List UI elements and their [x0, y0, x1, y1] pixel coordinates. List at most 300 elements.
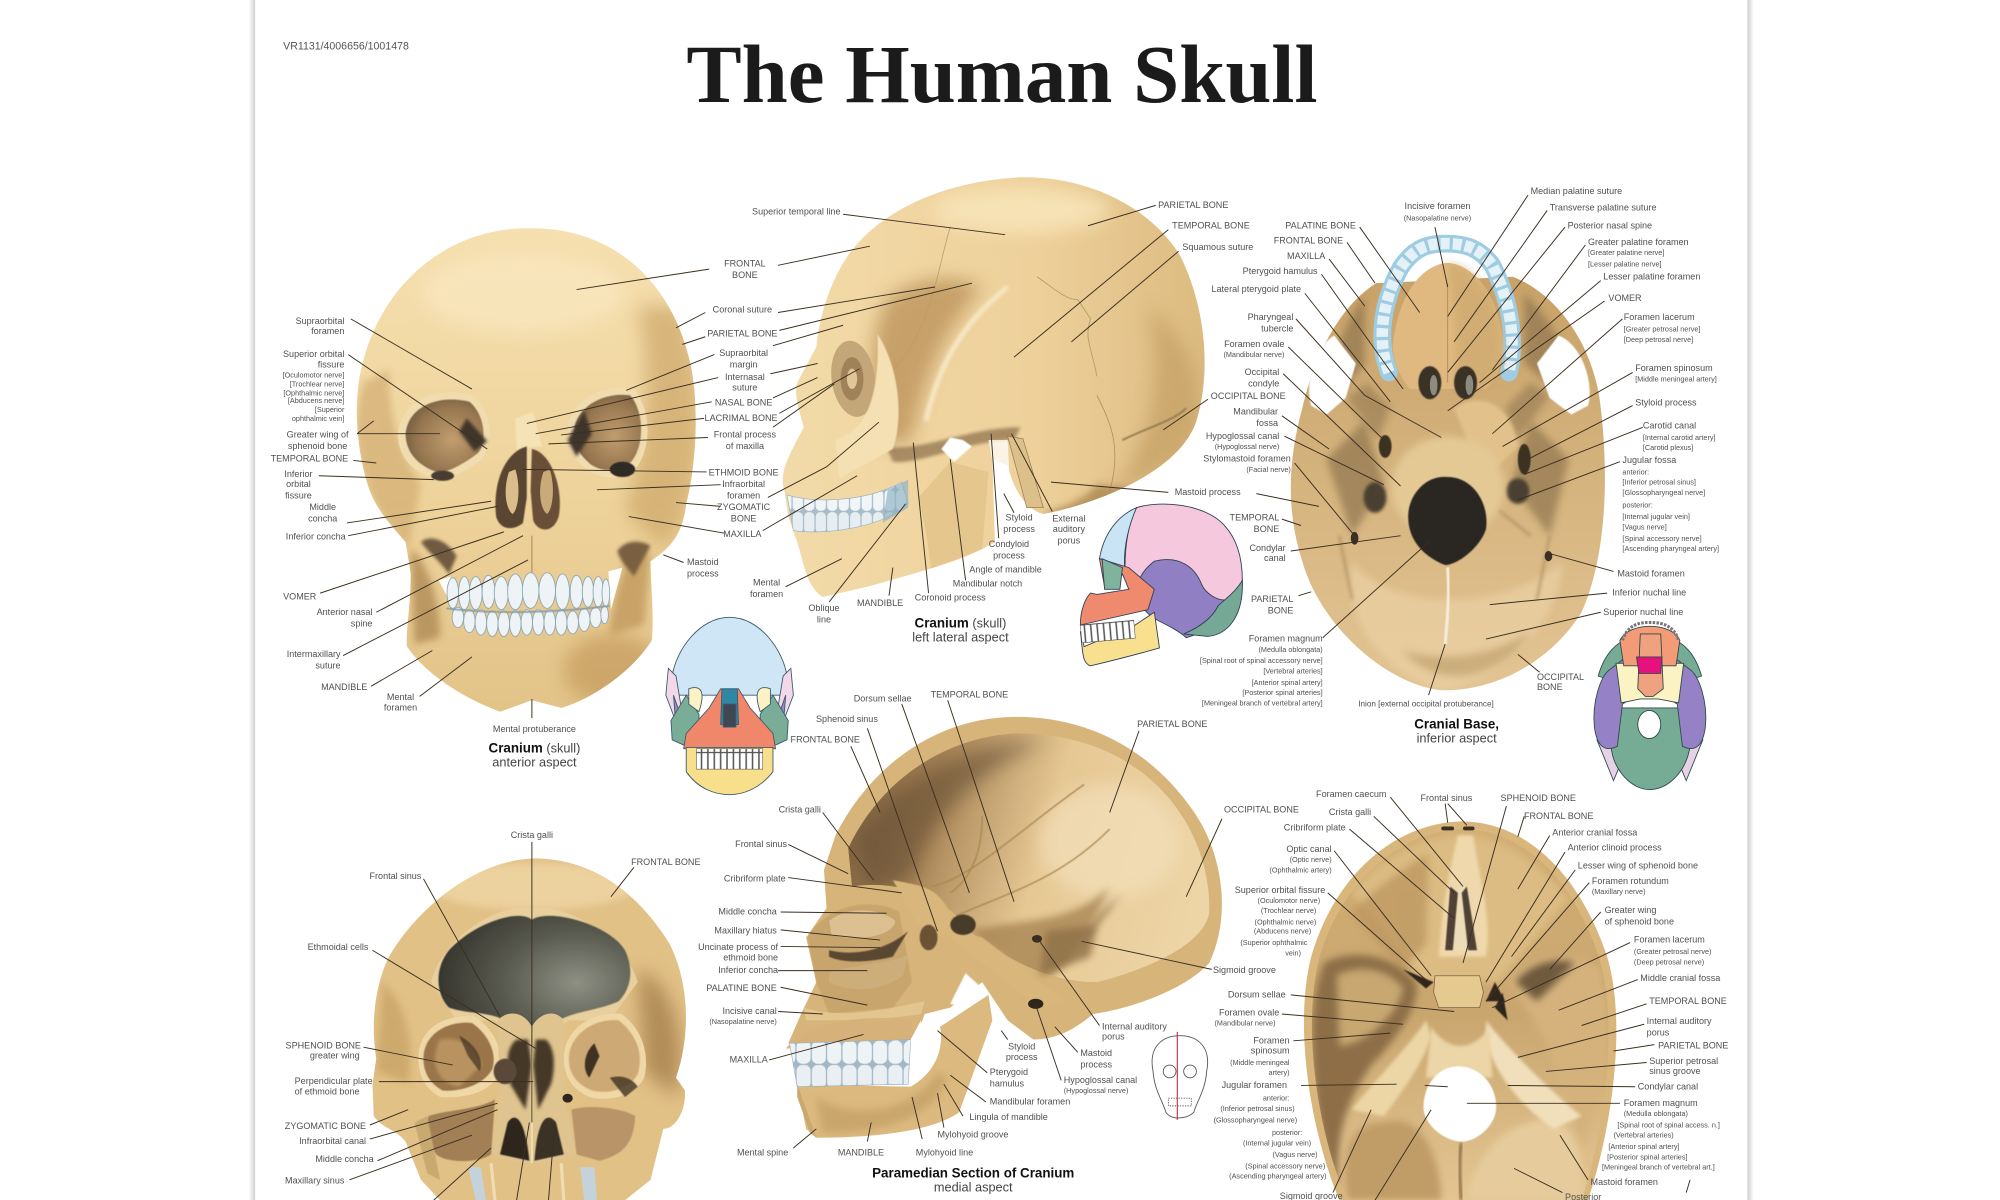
labels: anterior skull left: [Trochlear nerve]	[290, 379, 344, 388]
labels: interior cranial base left: (Ophthalmic nerve)	[1255, 918, 1316, 927]
labels: coronal section: Infraorbital canal	[299, 1136, 366, 1146]
nasal conchae	[807, 904, 912, 1014]
labels: anterior skull left: foramen	[311, 326, 344, 336]
labels: interior cranial base left: (Inferior petrosal sinus)	[1220, 1104, 1295, 1113]
labels: paramedian: Incisive canal	[722, 1006, 777, 1016]
labels: anterior skull left: Intermaxillary	[287, 649, 341, 659]
labels: inferior skull right: Median palatine suture	[1531, 186, 1622, 196]
labels: inferior skull left: OCCIPITAL BONE	[1211, 391, 1286, 401]
caption: lateral aspect: left lateral aspect	[912, 630, 1009, 645]
cribriform plate	[1450, 886, 1473, 950]
labels: anterior skull left: Supraorbital	[296, 316, 344, 326]
labels: anterior skull left: [Superior	[315, 405, 345, 414]
labels: interior cranial base left: (Superior ophthalmic	[1240, 938, 1308, 947]
labels: paramedian: Dorsum sellae	[854, 694, 912, 704]
labels: inferior skull left: Mandibular	[1233, 407, 1278, 417]
labels: inferior skull left: [Posterior spinal arteries]	[1242, 688, 1323, 697]
labels: interior cranial base left: (Vagus nerve)	[1272, 1150, 1318, 1159]
labels: inferior skull right: Foramen lacerum	[1624, 312, 1695, 322]
foramina	[1379, 435, 1392, 458]
labels: lateral skull: process	[993, 551, 1025, 561]
labels: interior cranial base left: Foramen	[1253, 1035, 1290, 1045]
labels: inferior skull left: (Facial nerve)	[1246, 465, 1291, 474]
labels: inferior skull left: Lateral pterygoid plate	[1211, 284, 1301, 294]
labels: coronal section: Crista galli	[511, 830, 553, 840]
labels: interior cranial base right: Internal auditory	[1647, 1016, 1712, 1026]
labels: inferior skull right: [Carotid plexus]	[1643, 443, 1693, 452]
labels: coronal section: Ethmoidal cells	[308, 942, 369, 952]
labels: inferior skull left: (Hypoglossal nerve)	[1215, 442, 1279, 451]
labels: interior cranial base right: Lesser wing of sphenoid bone	[1578, 861, 1698, 871]
labels: interior cranial base left: (Optic nerve)	[1290, 855, 1332, 864]
labels: interior cranial base right: [Spinal root of spinal access. n.]	[1617, 1121, 1720, 1130]
labels: inferior skull right: Styloid process	[1635, 398, 1697, 408]
labels: lateral skull: Mastoid process	[1175, 487, 1241, 497]
labels: inferior skull right: Inion [external occipital protuberance]	[1358, 700, 1494, 709]
labels: inferior skull left: Stylomastoid foramen	[1203, 454, 1291, 464]
labels: anterior skull right: BONE	[731, 514, 756, 524]
caption: lateral aspect	[912, 616, 1009, 645]
labels: interior cranial base left: (Ophthalmic artery)	[1269, 865, 1332, 874]
labels: coronal section: of ethmoid bone	[295, 1086, 360, 1096]
labels: inferior skull left: [Spinal root of spinal accessory nerve]	[1200, 656, 1323, 665]
leader lines: inferior skull	[1256, 195, 1643, 695]
labels: anterior skull left: Mental	[387, 692, 414, 702]
labels: inferior skull right: VOMER	[1608, 293, 1642, 303]
labels: anterior skull left: orbital	[286, 479, 311, 489]
labels: anterior skull right: Frontal process	[714, 430, 777, 440]
labels: paramedian: Uncinate process of	[698, 942, 779, 952]
labels: anterior skull left: foramen	[384, 702, 417, 712]
teeth	[447, 573, 610, 636]
illustration: interior cranial base	[1304, 821, 1616, 1200]
labels: interior cranial base left: (Mandibular nerve)	[1215, 1019, 1276, 1028]
labels: anterior skull left	[271, 316, 417, 712]
labels: paramedian: Sigmoid groove	[1213, 965, 1276, 975]
caption: lateral aspect: Cranium (skull)	[915, 616, 1006, 631]
labels: inferior skull right: posterior:	[1622, 501, 1653, 510]
labels: inferior skull left: (Medulla oblongata)	[1258, 645, 1323, 654]
labels: interior cranial base right: (Maxillary nerve)	[1592, 887, 1646, 896]
illustration: paramedian skull	[786, 717, 1222, 1138]
labels: inferior skull left: PALATINE BONE	[1285, 220, 1356, 230]
caption: medial aspect: Paramedian Section of Cranium	[872, 1165, 1074, 1180]
labels: inferior skull right	[1358, 186, 1719, 709]
labels: interior cranial base right: [Posterior spinal arteries]	[1607, 1152, 1688, 1161]
labels: paramedian: Maxillary hiatus	[714, 926, 777, 936]
mouth cavity and jaw	[786, 1018, 916, 1048]
labels: anterior skull right: Coronal suture	[713, 305, 772, 315]
labels: anterior skull right: ZYGOMATIC	[717, 502, 771, 512]
labels: interior cranial base right: (Greater petrosal nerve)	[1634, 947, 1711, 956]
caption: medial aspect	[872, 1165, 1074, 1194]
labels: lateral skull: Mandibular notch	[953, 579, 1022, 589]
labels: inferior skull left: Hypoglossal canal	[1206, 431, 1279, 441]
white gap	[950, 973, 982, 1008]
caption: medial aspect: medial aspect	[934, 1179, 1013, 1194]
labels: interior cranial base right: Foramen rotundum	[1592, 876, 1669, 886]
labels: anterior skull left: spine	[351, 618, 372, 628]
labels: inferior skull left: FRONTAL BONE	[1274, 236, 1343, 246]
labels: anterior skull right: suture	[732, 382, 757, 392]
icon: color-coded skull anterior	[666, 617, 793, 795]
labels: lateral skull: process	[1003, 524, 1035, 534]
leader lines: coronal section	[349, 842, 634, 1200]
labels: lateral skull: TEMPORAL BONE	[1172, 220, 1250, 230]
labels: lateral skull	[750, 200, 1253, 624]
labels: interior cranial base left	[1214, 789, 1386, 1200]
labels: paramedian	[698, 690, 1299, 1158]
labels: anterior skull left: concha	[308, 514, 338, 524]
leader lines: lateral skull	[763, 205, 1208, 602]
orbits	[398, 393, 490, 480]
labels: interior cranial base right: Anterior cranial fossa	[1552, 827, 1638, 837]
labels: inferior skull right: Inferior nuchal line	[1612, 588, 1686, 598]
labels: inferior skull left: Foramen magnum	[1249, 634, 1323, 644]
labels: inferior skull right: anterior:	[1622, 467, 1649, 476]
orbits coronal	[418, 1016, 501, 1097]
labels: interior cranial base left: vein)	[1285, 948, 1301, 957]
labels: inferior skull left: canal	[1264, 553, 1286, 563]
labels: inferior skull left: MAXILLA	[1287, 251, 1326, 261]
labels: anterior skull right: foramen	[727, 491, 760, 501]
labels: anterior skull left: TEMPORAL BONE	[271, 454, 348, 464]
labels: anterior skull right: LACRIMAL BONE	[705, 413, 778, 423]
labels: interior cranial base right	[1421, 793, 1728, 1200]
labels: anterior skull right: margin	[730, 359, 757, 369]
illustration: lateral skull	[783, 177, 1205, 597]
labels: inferior skull left: [Meningeal branch of vertebral artery]	[1202, 698, 1323, 707]
labels: paramedian: Sphenoid sinus	[816, 714, 878, 724]
labels: inferior skull right: [Spinal accessory nerve]	[1622, 534, 1702, 543]
labels: paramedian: (Nasopalatine nerve)	[709, 1017, 777, 1026]
labels: inferior skull right: Foramen spinosum	[1635, 363, 1713, 373]
labels: coronal section: Frontal sinus	[370, 871, 422, 881]
labels: paramedian: (Hypoglossal nerve)	[1064, 1086, 1128, 1095]
labels: anterior skull right: Mastoid	[687, 557, 719, 567]
labels: interior cranial base left: Optic canal	[1286, 844, 1332, 854]
caption: anterior aspect	[489, 741, 580, 770]
labels: interior cranial base right: [Meningeal branch of vertebral art.]	[1602, 1163, 1715, 1172]
labels: inferior skull left: condyle	[1248, 378, 1279, 388]
labels: paramedian: Lingula of mandible	[969, 1112, 1048, 1122]
labels: anterior skull left: sphenoid bone	[288, 441, 347, 451]
labels: anterior skull left: MANDIBLE	[321, 682, 367, 692]
labels: anterior skull left: [Abducens nerve]	[288, 396, 344, 405]
labels: interior cranial base right: of sphenoid bone	[1605, 917, 1674, 927]
labels: coronal section	[285, 830, 701, 1186]
labels: lateral skull: Coronoid process	[915, 593, 986, 603]
labels: interior cranial base right: Foramen lacerum	[1634, 935, 1705, 945]
upper teeth arc	[1382, 244, 1512, 372]
labels: coronal section: Middle concha	[315, 1154, 375, 1164]
labels: interior cranial base right: Greater wing	[1605, 905, 1656, 915]
labels: lateral skull: External	[1052, 514, 1085, 524]
sella	[1434, 976, 1483, 1008]
labels: paramedian: Crista galli	[779, 804, 821, 814]
labels: interior cranial base left: Cribriform plate	[1284, 822, 1346, 832]
labels: paramedian: Pterygoid	[990, 1067, 1028, 1077]
labels: interior cranial base left: Dorsum sellae	[1228, 989, 1286, 999]
labels: paramedian: Styloid	[1008, 1042, 1035, 1052]
labels: paramedian: PALATINE BONE	[706, 983, 777, 993]
labels: paramedian: Internal auditory	[1102, 1021, 1167, 1031]
caption: inferior aspect: inferior aspect	[1417, 730, 1497, 745]
labels: paramedian: Mental spine	[737, 1148, 788, 1158]
labels: inferior skull left: [Anterior spinal artery]	[1252, 678, 1323, 687]
white gap and teeth	[941, 438, 972, 462]
labels: anterior skull left: [Ophthalmic nerve]	[283, 388, 344, 397]
labels: anterior skull left: ophthalmic vein]	[292, 414, 344, 423]
labels: anterior skull left: [Oculomotor nerve]	[283, 371, 344, 380]
labels: anterior skull right: MAXILLA	[723, 529, 762, 539]
labels: anterior skull left: Superior orbital	[283, 349, 344, 359]
labels: paramedian: Frontal sinus	[735, 839, 787, 849]
illustration: anterior skull	[357, 228, 700, 712]
labels: anterior skull left: fissure	[318, 359, 344, 369]
labels: anterior skull left: VOMER	[283, 591, 317, 601]
labels: interior cranial base left: (Ascending pharyngeal artery)	[1229, 1172, 1327, 1181]
labels: interior cranial base left: artery)	[1269, 1068, 1290, 1077]
labels: inferior skull left: Foramen ovale	[1224, 339, 1284, 349]
labels: anterior skull right: Internasal	[725, 372, 765, 382]
labels: anterior skull right: Infraorbital	[722, 479, 765, 489]
labels: coronal section: greater wing	[310, 1051, 360, 1061]
lateral orbit	[827, 338, 880, 420]
labels: inferior skull right: Greater palatine foramen	[1588, 237, 1689, 247]
labels: paramedian: Cribriform plate	[724, 873, 786, 883]
labels: interior cranial base right: SPHENOID BONE	[1501, 793, 1576, 803]
labels: interior cranial base left: Foramen caecum	[1316, 789, 1386, 799]
nasal cavity	[491, 1013, 577, 1166]
labels: paramedian: OCCIPITAL BONE	[1224, 804, 1299, 814]
labels: inferior skull right: OCCIPITAL	[1537, 672, 1584, 682]
labels: interior cranial base left: (Oculomotor nerve)	[1258, 896, 1320, 905]
labels: lateral skull: PARIETAL BONE	[1158, 200, 1228, 210]
labels: inferior skull right: Superior nuchal line	[1603, 607, 1683, 617]
panel: cranium left lateral aspect	[750, 177, 1253, 645]
labels: interior cranial base right: sinus groove	[1649, 1066, 1701, 1076]
labels: anterior skull right: Supraorbital	[719, 348, 768, 358]
labels: inferior skull right: [Deep petrosal nerve]	[1624, 335, 1693, 344]
labels: lateral skull: Oblique	[808, 603, 840, 613]
labels: inferior skull right: Jugular fossa	[1622, 455, 1677, 465]
labels: interior cranial base right: FRONTAL BONE	[1524, 811, 1593, 821]
labels: interior cranial base right: Foramen magnum	[1624, 1098, 1698, 1108]
labels: lateral skull: line	[817, 614, 831, 624]
labels: anterior skull left: Greater wing of	[287, 430, 349, 440]
labels: interior cranial base right: porus	[1647, 1028, 1670, 1038]
labels: inferior skull left: Condylar	[1249, 543, 1286, 553]
labels: interior cranial base left: (Spinal accessory nerve)	[1245, 1161, 1325, 1170]
labels: inferior skull left: Occipital	[1245, 367, 1279, 377]
labels: lateral skull: Superior temporal line	[752, 206, 841, 216]
labels: paramedian: hamulus	[990, 1079, 1024, 1089]
labels: anterior skull right: of maxilla	[726, 441, 765, 451]
labels: interior cranial base right: Mastoid foramen	[1591, 1177, 1658, 1187]
labels: interior cranial base right: (Medulla oblongata)	[1624, 1109, 1688, 1118]
labels: lateral skull: auditory	[1053, 524, 1085, 534]
labels: anterior skull left: Middle	[309, 502, 336, 512]
labels: anterior skull left: Anterior nasal	[317, 607, 372, 617]
labels: interior cranial base left: anterior:	[1263, 1094, 1290, 1103]
labels: lateral skull: Mental	[753, 577, 780, 587]
panel: cranial base superior aspect	[1214, 789, 1728, 1200]
labels: interior cranial base right: [Anterior spinal artery]	[1608, 1142, 1679, 1151]
labels: anterior skull right: NASAL BONE	[715, 398, 772, 408]
labels: paramedian: PARIETAL BONE	[1137, 719, 1207, 729]
labels: lateral skull: Styloid	[1006, 512, 1033, 522]
labels: coronal section: Perpendicular plate	[295, 1076, 373, 1086]
labels: inferior skull left: PARIETAL	[1251, 594, 1293, 604]
labels: anterior skull right: BONE	[732, 270, 758, 280]
labels: inferior skull right: BONE	[1537, 682, 1563, 692]
labels: anterior skull right: PARIETAL BONE	[707, 329, 777, 339]
labels: anterior skull left: Inferior	[284, 469, 313, 479]
labels: inferior skull right: [Inferior petrosal sinus]	[1622, 478, 1696, 487]
labels: inferior skull left	[1200, 220, 1356, 707]
illustration: coronal section skull	[372, 858, 686, 1200]
panel: cranium anterior aspect	[271, 228, 779, 770]
maxillary sinuses	[426, 1099, 495, 1161]
foramen magnum white	[1423, 1066, 1496, 1142]
labels: inferior skull right: [Lesser palatine nerve]	[1588, 260, 1662, 269]
labels: interior cranial base right: Superior petrosal	[1649, 1056, 1718, 1066]
root stubs	[468, 1167, 597, 1200]
labels: paramedian: FRONTAL BONE	[791, 734, 860, 744]
labels: inferior skull right: [Greater petrosal nerve]	[1624, 325, 1700, 334]
labels: anterior skull right	[493, 259, 779, 734]
labels: paramedian: Mastoid	[1080, 1048, 1112, 1058]
labels: lateral skull: MANDIBLE	[857, 598, 903, 608]
labels: inferior skull right: [Greater palatine nerve]	[1588, 248, 1664, 257]
labels: inferior skull left: [Vertebral arteries]	[1263, 666, 1323, 675]
labels: anterior skull right: Mental protuberance	[493, 724, 576, 734]
labels: inferior skull left: tubercle	[1261, 324, 1293, 334]
labels: anterior skull left: fissure	[285, 491, 312, 501]
labels: coronal section: ZYGOMATIC BONE	[285, 1121, 366, 1131]
labels: anterior skull right: ETHMOID BONE	[709, 468, 779, 478]
labels: interior cranial base right: (Vertebral arteries)	[1614, 1131, 1674, 1140]
labels: paramedian: process	[1006, 1052, 1038, 1062]
foramen magnum	[1408, 477, 1487, 565]
labels: inferior skull left: Pterygoid hamulus	[1243, 266, 1318, 276]
labels: inferior skull left: (Mandibular nerve)	[1223, 350, 1284, 359]
labels: interior cranial base right: TEMPORAL BONE	[1649, 996, 1727, 1006]
labels: interior cranial base left: Crista galli	[1329, 807, 1371, 817]
frontal sinuses slits	[1441, 827, 1454, 830]
leader lines: anterior skull	[319, 269, 724, 718]
labels: inferior skull left: BONE	[1268, 606, 1293, 616]
labels: inferior skull left: BONE	[1254, 524, 1279, 534]
labels: interior cranial base left: (Trochlear nerve)	[1261, 906, 1316, 915]
poster sheet with edge shadows	[249, 0, 1754, 1200]
labels: anterior skull right: process	[687, 569, 719, 579]
labels: inferior skull right: Mastoid foramen	[1617, 569, 1685, 579]
labels: coronal section: SPHENOID BONE	[286, 1040, 361, 1050]
catalog code: VR1131/4006656/1001478	[283, 41, 409, 53]
labels: paramedian: porus	[1102, 1032, 1125, 1042]
labels: inferior skull right: [Internal carotid artery]	[1643, 433, 1716, 442]
hard palate	[1393, 263, 1503, 389]
labels: coronal section: FRONTAL BONE	[631, 857, 701, 867]
white mouth corners	[439, 577, 454, 610]
title: The Human Skull	[686, 28, 1317, 120]
labels: paramedian: MAXILLA	[730, 1054, 769, 1064]
labels: interior cranial base right: Middle cranial fossa	[1640, 973, 1721, 983]
labels: interior cranial base left: Superior orbital fissure	[1235, 885, 1325, 895]
icon: color-coded skull inferior	[1594, 622, 1706, 790]
labels: paramedian: process	[1080, 1060, 1113, 1070]
labels: inferior skull right: Carotid canal	[1643, 421, 1696, 431]
labels: paramedian: Mylohyoid groove	[938, 1130, 1008, 1140]
labels: interior cranial base left: (Middle meningeal	[1230, 1058, 1290, 1067]
leader lines: interior cranial base	[1282, 797, 1690, 1200]
labels: inferior skull right: [Internal jugular vein]	[1622, 512, 1690, 521]
labels: interior cranial base right: PARIETAL BONE	[1658, 1040, 1728, 1050]
labels: paramedian: Middle concha	[718, 907, 778, 917]
caption: anterior aspect: Cranium (skull)	[489, 741, 580, 756]
labels: coronal section: Maxillary sinus	[285, 1176, 345, 1186]
labels: paramedian: TEMPORAL BONE	[931, 690, 1008, 700]
labels: inferior skull left: Pharyngeal	[1248, 312, 1293, 322]
labels: anterior skull left: Inferior concha	[286, 532, 347, 542]
labels: inferior skull right: Incisive foramen	[1405, 201, 1470, 211]
labels: interior cranial base left: posterior:	[1272, 1128, 1302, 1137]
choanae	[1418, 366, 1441, 399]
labels: inferior skull right: [Glossopharyngeal nerve]	[1622, 488, 1705, 497]
labels: lateral skull: foramen	[750, 589, 783, 599]
labels: paramedian: Hypoglossal canal	[1064, 1075, 1137, 1085]
labels: inferior skull right: [Ascending pharyngeal artery]	[1622, 544, 1719, 553]
labels: interior cranial base left: (Abducens nerve)	[1254, 927, 1311, 936]
labels: lateral skull: porus	[1058, 535, 1081, 545]
frontal sinus	[431, 908, 638, 1059]
caption: anterior aspect: anterior aspect	[492, 755, 577, 770]
labels: inferior skull right: [Middle meningeal artery]	[1635, 374, 1717, 383]
labels: lateral skull: Angle of mandible	[969, 565, 1042, 575]
caption: inferior aspect: Cranial Base,	[1414, 716, 1499, 731]
icon: color-coded skull lateral	[1080, 504, 1242, 666]
panel: paramedian section	[698, 690, 1299, 1194]
labels: interior cranial base right: Condylar canal	[1638, 1081, 1698, 1091]
labels: paramedian: Inferior concha	[718, 965, 779, 975]
labels: paramedian: ethmoid bone	[723, 952, 778, 962]
labels: paramedian: Mandibular foramen	[990, 1097, 1070, 1107]
labels: interior cranial base right: Frontal sinus	[1421, 793, 1473, 803]
labels: interior cranial base left: Jugular foramen	[1222, 1080, 1287, 1090]
labels: interior cranial base left: spinosum	[1251, 1046, 1290, 1056]
labels: inferior skull right: Transverse palatine suture	[1550, 202, 1657, 212]
labels: lateral skull: Condyloid	[989, 539, 1029, 549]
labels: inferior skull right: Lesser palatine foramen	[1603, 271, 1700, 281]
labels: anterior skull left: suture	[315, 660, 341, 670]
labels: interior cranial base left: (Glossopharyngeal nerve)	[1214, 1115, 1297, 1124]
labels: interior cranial base left: Foramen ovale	[1219, 1007, 1279, 1017]
leader lines: paramedian	[769, 700, 1222, 1148]
illustration: inferior skull	[1291, 244, 1605, 690]
labels: interior cranial base right: Anterior clinoid process	[1568, 843, 1662, 853]
labels: inferior skull right: (Nasopalatine nerve)	[1404, 214, 1471, 223]
labels: inferior skull left: TEMPORAL	[1230, 512, 1279, 522]
caption: inferior aspect	[1414, 716, 1499, 745]
labels: interior cranial base left: (Internal jugular vein)	[1243, 1138, 1311, 1147]
panel: coronal section	[285, 830, 701, 1200]
labels: paramedian: MANDIBLE	[838, 1148, 884, 1158]
panel: cranial base inferior aspect	[1200, 186, 1719, 745]
icon: section plane skull with red line	[1152, 1032, 1208, 1120]
labels: inferior skull right: Posterior nasal spine	[1568, 220, 1652, 230]
